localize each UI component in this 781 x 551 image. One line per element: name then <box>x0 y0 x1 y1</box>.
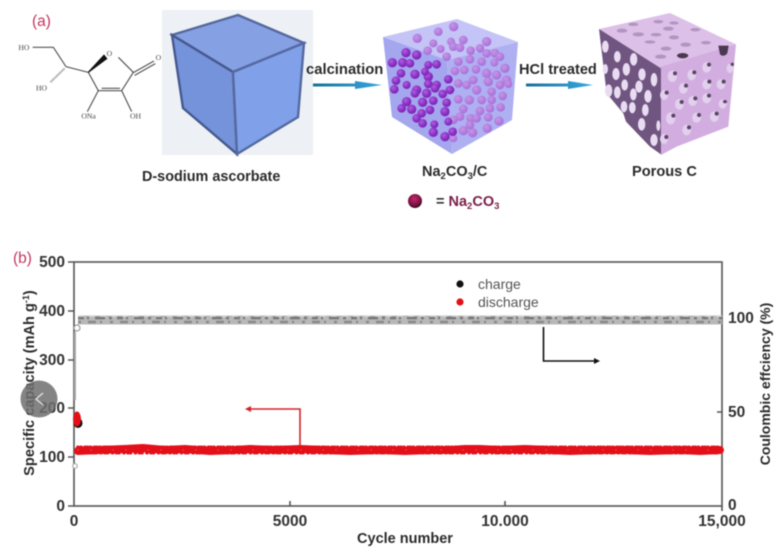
icon: sodium ascorbate molecule: HO <box>18 43 30 52</box>
legend <box>456 276 539 310</box>
right axis tick labels: 50 <box>728 404 745 421</box>
label: calcination: calcination <box>306 62 383 78</box>
arrow: calcination <box>313 81 382 89</box>
caption: Na2CO3/C: 3 <box>468 171 473 182</box>
caption: D-sodium ascorbate: D-sodium ascorbate <box>142 169 280 185</box>
panel: cycling performance chart <box>13 250 773 547</box>
legend label: Na2CO3: 3 <box>494 201 499 212</box>
icon: Na2CO3 sphere legend <box>408 194 422 208</box>
icon: Na2CO3/C composite cube with spheres <box>383 19 518 154</box>
right axis title: Coulombic effciency (%) <box>757 303 773 465</box>
arrowhead: left <box>245 406 251 412</box>
left axis tick labels: 0 <box>56 498 65 515</box>
left axis tick labels: 100 <box>39 449 65 466</box>
arrow: HCl treated <box>526 81 593 89</box>
plot frame and ticks <box>68 262 722 511</box>
label: HCl treated: HCl treated <box>519 62 597 78</box>
icon: sodium ascorbate molecule: ONa <box>81 111 96 120</box>
right axis tick labels: 100 <box>728 310 754 327</box>
x axis title: Cycle number <box>357 531 453 547</box>
x axis tick labels: 0 <box>70 513 78 530</box>
legend label: Na2CO3: = Na <box>436 194 467 210</box>
left axis title: ) <box>22 290 38 295</box>
caption: Na2CO3/C: 2 <box>441 171 446 182</box>
big dark pores <box>677 46 729 58</box>
x axis tick labels: 5000 <box>273 513 307 530</box>
icon: sodium ascorbate molecule: O <box>156 53 162 62</box>
caption: Porous C: Porous C <box>632 164 697 180</box>
caption: Na2CO3/C: /C <box>473 164 488 180</box>
icon: gray carousel back button <box>20 380 58 418</box>
left axis tick labels: 200 <box>39 400 65 417</box>
icon: sodium ascorbate molecule: OH <box>130 111 142 120</box>
left axis tick labels: 300 <box>39 352 65 369</box>
x axis tick labels: 10.000 <box>481 513 529 530</box>
legend: discharge <box>478 294 539 310</box>
panel: synthesis scheme <box>18 10 736 212</box>
legend label: Na2CO3: CO <box>472 194 494 210</box>
icon: sodium ascorbate molecule: O <box>107 49 113 58</box>
legend: charge <box>478 276 521 292</box>
arrow: to left axis <box>251 409 300 445</box>
legend label: Na2CO3: 2 <box>467 201 472 212</box>
series: coulombic efficiency band <box>73 316 722 468</box>
arrowhead: right <box>594 358 600 364</box>
x axis tick labels <box>70 513 746 530</box>
x axis tick labels: 15,000 <box>698 513 746 530</box>
series: initial capacity points <box>73 412 82 428</box>
icon: porous carbon cube <box>599 13 736 155</box>
series: discharge capacity band <box>78 448 720 452</box>
left axis title: Specific capacity (mAh g <box>22 303 38 476</box>
right axis tick labels: 0 <box>728 497 737 514</box>
left axis tick labels: 500 <box>39 254 65 271</box>
icon: blue cube <box>162 10 313 155</box>
left axis title: -1 <box>21 295 31 303</box>
panel label (b): (b) <box>13 250 32 267</box>
icon: sodium ascorbate molecule: HO <box>36 84 48 93</box>
caption: Na2CO3/C: CO <box>446 164 468 180</box>
right axis tick labels <box>728 310 754 514</box>
caption: Na2CO3/C: Na <box>422 164 441 180</box>
left axis tick labels: 400 <box>39 303 65 320</box>
icon: sodium ascorbate molecule <box>18 43 162 120</box>
panel label (a): (a) <box>32 13 51 30</box>
arrow: to right axis <box>544 327 594 361</box>
left axis tick labels <box>39 254 65 515</box>
